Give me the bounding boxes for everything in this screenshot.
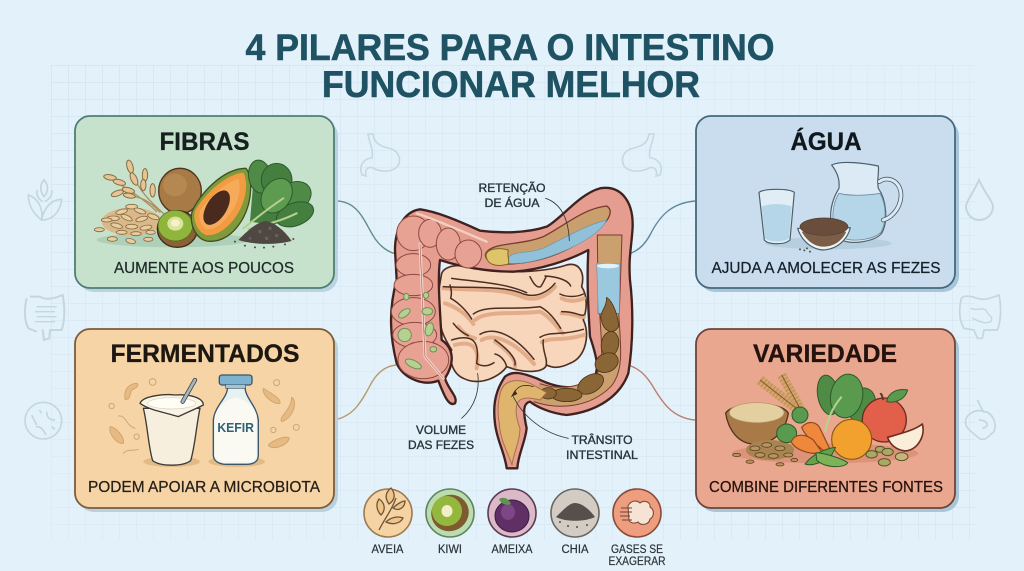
label: volume das fezes — [408, 423, 474, 452]
icon: faint water drop right — [966, 180, 993, 220]
icon: faint intestine left — [25, 295, 64, 340]
connector: agua to intestine — [628, 201, 695, 254]
caption: fibras: AUMENTE AOS POUCOS — [114, 260, 294, 277]
connector: variedade to intestine — [628, 365, 695, 420]
icon: faint bacteria left — [25, 402, 62, 439]
icon: faint wheat leaf left — [28, 180, 62, 220]
icon: faint organ right — [965, 400, 995, 439]
connector: fermentados to intestine — [334, 365, 396, 420]
label: transito intestinal: TRÂNSITO — [572, 432, 632, 447]
label: transito intestinal: INTESTINAL — [566, 448, 638, 462]
icon: faint intestine right — [960, 295, 1001, 338]
leader lines — [462, 198, 569, 438]
icon: chia: CHIA — [562, 544, 589, 556]
icon: ameixa — [488, 489, 536, 556]
icon: gases: EXAGERAR — [608, 556, 666, 568]
icon: kiwi — [425, 488, 475, 556]
caption: variedade: COMBINE DIFERENTES FONTES — [709, 479, 943, 496]
label: volume das fezes: DAS FEZES — [408, 438, 474, 452]
sigmoid and rectum lumen — [498, 381, 547, 465]
title: FUNCIONAR MELHOR — [322, 64, 700, 105]
label: transito intestinal — [566, 432, 638, 462]
icon: kiwi: KIWI — [438, 544, 462, 556]
title — [246, 27, 774, 105]
heading: variedade: VARIEDADE — [753, 340, 897, 368]
title: 4 PILARES PARA O INTESTINO — [246, 27, 774, 68]
illustration: yogurt, kefir and microbes — [109, 375, 299, 467]
panel: agua — [696, 116, 959, 292]
transverse lumen with water — [485, 206, 610, 264]
illustration: water glass, jug and chia bowl — [759, 162, 901, 253]
green gut contents — [397, 292, 437, 371]
icon: aveia: AVEIA — [372, 544, 404, 556]
large intestine — [391, 188, 633, 468]
panel: variedade — [696, 329, 959, 512]
panel: fermentados — [75, 329, 338, 512]
label: volume das fezes: VOLUME — [416, 423, 466, 437]
illustration: mixed foods — [726, 372, 923, 467]
heading: agua: ÁGUA — [790, 127, 862, 156]
icon: chia — [551, 489, 599, 556]
label: retencao de agua — [478, 181, 546, 210]
icon: ameixa: AMEIXA — [492, 544, 533, 556]
heading: fermentados: FERMENTADOS — [110, 340, 300, 368]
icon: faint stomach right — [622, 134, 661, 176]
connector: fibras to intestine — [334, 201, 396, 254]
colon haustra — [391, 216, 482, 379]
panel: fibras — [75, 116, 338, 292]
label: retencao de agua: DE ÁGUA — [484, 195, 540, 210]
icon: aveia — [364, 488, 412, 556]
heading: fibras: FIBRAS — [160, 128, 250, 156]
illustration: yogurt, kefir and microbes: KEFIR — [217, 421, 254, 435]
small intestine — [439, 264, 587, 381]
descending lumen with water and stool — [537, 303, 611, 397]
icon: faint stomach left — [361, 134, 400, 176]
illustration: fibre foods — [94, 158, 317, 249]
caption: fermentados: PODEM APOIAR A MICROBIOTA — [88, 479, 320, 496]
label: retencao de agua: RETENÇÃO — [478, 181, 546, 195]
caption: agua: AJUDA A AMOLECER AS FEZES — [712, 260, 940, 277]
icon: gases: GASES SE — [611, 544, 663, 556]
icon: gases — [608, 489, 666, 568]
icon row — [364, 488, 666, 568]
illustration: intestines — [391, 188, 633, 468]
